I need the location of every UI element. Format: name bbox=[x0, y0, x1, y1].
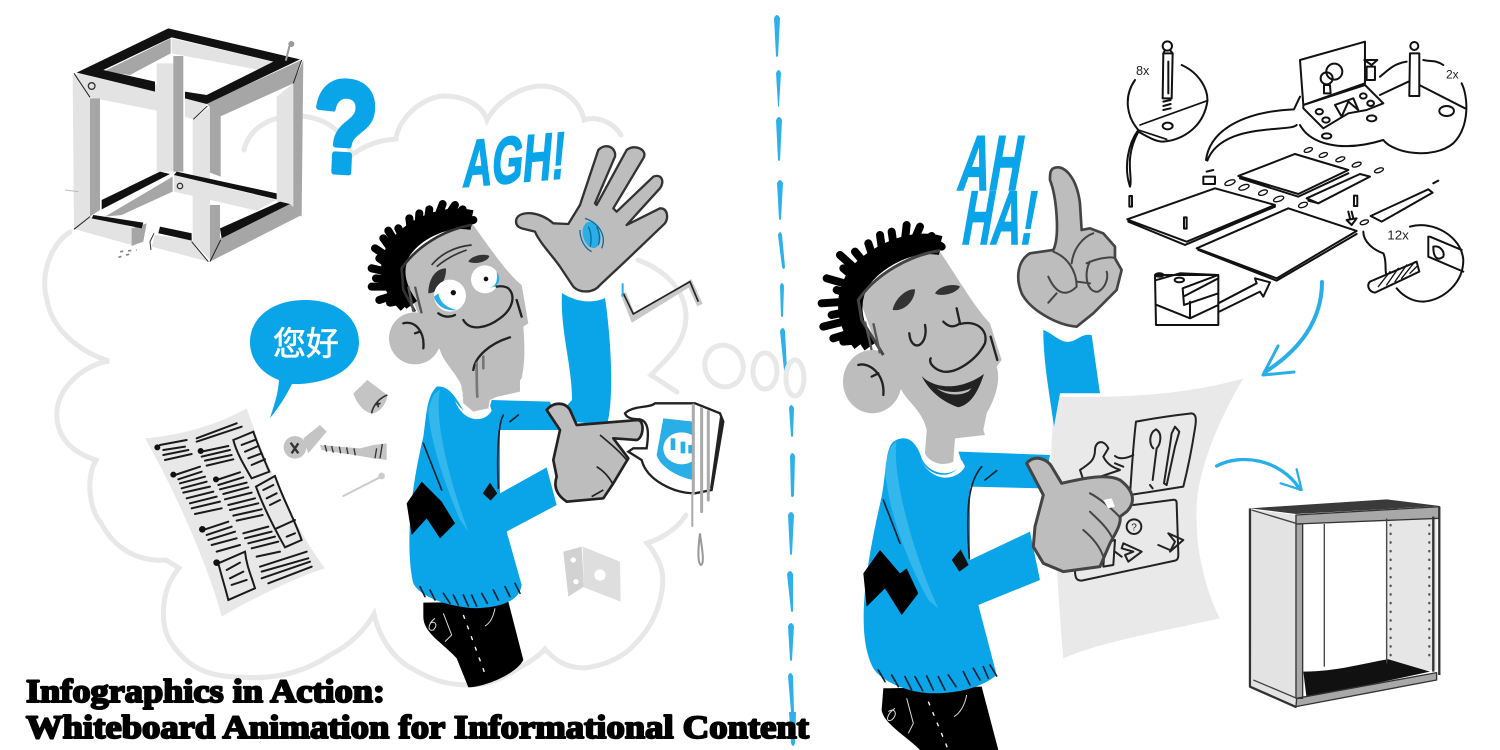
right figure: raised arm bbox=[1043, 330, 1100, 427]
curved arrow to poster bbox=[1263, 282, 1322, 375]
corner joint detail with arrow bbox=[1155, 273, 1270, 325]
left figure: head bbox=[372, 204, 528, 407]
loose hardware parts bbox=[284, 380, 387, 496]
title: Infographics in Action: bbox=[26, 674, 385, 710]
metal bracket bbox=[563, 547, 621, 602]
right figure: pointing hand bbox=[1018, 167, 1122, 327]
callout: bracket and 2x dowel bbox=[1206, 42, 1466, 161]
callout: bracket and 2x dowel: 2x bbox=[1446, 67, 1459, 81]
small bent nail bbox=[623, 282, 700, 318]
left figure: sweater and legs bbox=[407, 380, 724, 687]
instruction poster held by the right figure bbox=[1051, 378, 1243, 658]
exploded assembly diagram bbox=[1127, 41, 1466, 325]
panels bbox=[1127, 147, 1438, 281]
impossible cube bbox=[65, 28, 303, 262]
assembled cabinet bbox=[1250, 499, 1440, 707]
left figure: open hand with blue stain bbox=[516, 146, 667, 291]
title bbox=[26, 674, 809, 746]
speech bubble with Chinese greeting: 您好 bbox=[273, 325, 339, 362]
question mark: ? bbox=[310, 53, 381, 203]
thought cloud outline bbox=[45, 86, 686, 685]
AH exclamation: AH bbox=[953, 120, 1030, 207]
instruction sheet bbox=[145, 408, 325, 617]
HA exclamation: HA! bbox=[957, 177, 1044, 261]
right figure: head bbox=[822, 225, 1002, 430]
title: Whiteboard Animation for Informational Content bbox=[26, 710, 809, 746]
speech bubble with Chinese greeting bbox=[250, 300, 359, 418]
instruction poster held by the right figure: ? bbox=[1131, 523, 1137, 534]
callout: 12x dowel: 12x bbox=[1387, 227, 1409, 242]
callout: 8x dowel bbox=[1127, 41, 1207, 187]
callout: 12x dowel bbox=[1363, 225, 1463, 302]
center dashed divider bbox=[774, 15, 796, 746]
AGH exclamation: AGH! bbox=[461, 119, 569, 202]
callout: 8x dowel: 8x bbox=[1136, 64, 1150, 78]
curved arrow to cabinet bbox=[1217, 460, 1302, 490]
thought ellipses bbox=[699, 340, 804, 396]
right figure: sweater and legs bbox=[863, 430, 1050, 750]
left figure: raised arm bbox=[553, 293, 611, 425]
right figure: lower hand holding poster bbox=[1027, 458, 1132, 572]
